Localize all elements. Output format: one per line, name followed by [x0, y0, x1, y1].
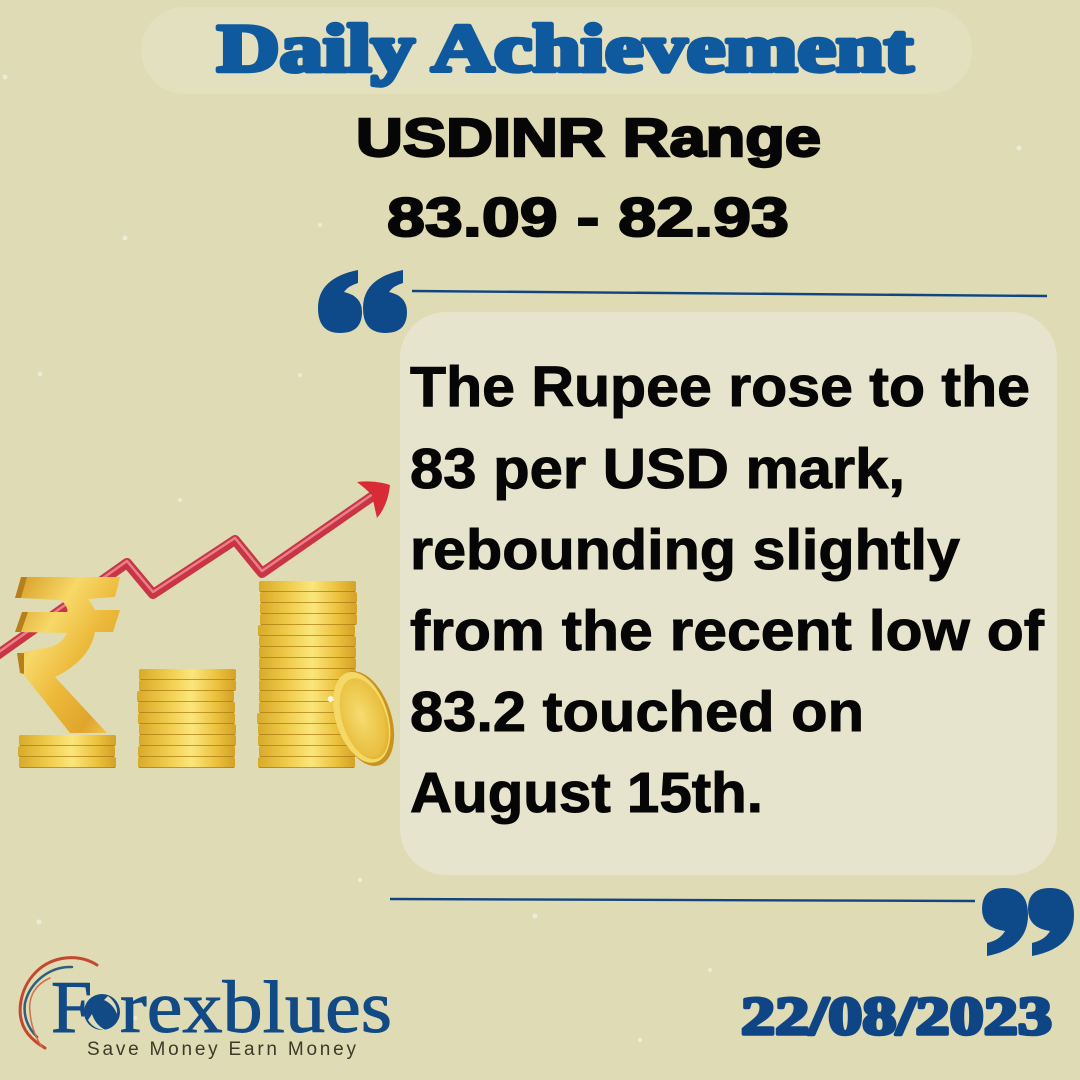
coin stack right	[257, 581, 357, 768]
logo arcs	[20, 958, 97, 1048]
logo wordmark rest: rexblues	[120, 967, 392, 1049]
illustration: rupee, coins and rising arrow	[0, 481, 405, 774]
opening quote mark	[318, 270, 407, 333]
top rule	[412, 291, 1047, 296]
body text: August 15th.	[410, 761, 763, 825]
body text: 83.2 touched on	[410, 680, 864, 744]
coin stack middle	[137, 669, 236, 768]
range values: 83.09 - 82.93	[387, 186, 789, 248]
date: 22/08/2023	[741, 986, 1052, 1046]
body text: The Rupee rose to the	[410, 355, 1030, 419]
gold rupee symbol	[15, 577, 120, 733]
logo wordmark: F	[51, 967, 92, 1049]
body text: rebounding slightly	[410, 518, 960, 582]
title: Daily Achievement	[217, 10, 913, 86]
coin stack left	[18, 735, 116, 768]
body text	[410, 355, 1045, 825]
closing quote mark	[982, 888, 1074, 956]
bottom rule	[390, 899, 975, 901]
body text: 83 per USD mark,	[410, 437, 905, 501]
logo tagline: Save Money Earn Money	[87, 1039, 356, 1060]
body text: from the recent low of	[410, 599, 1045, 663]
text panel	[400, 312, 1057, 875]
title pill	[141, 7, 972, 94]
logo: Forexblues	[20, 958, 392, 1060]
heading: USDINR range: USDINR Range	[356, 108, 821, 168]
logo globe	[84, 994, 120, 1030]
leaning gold coin	[322, 664, 405, 774]
rising arrow	[0, 481, 390, 656]
